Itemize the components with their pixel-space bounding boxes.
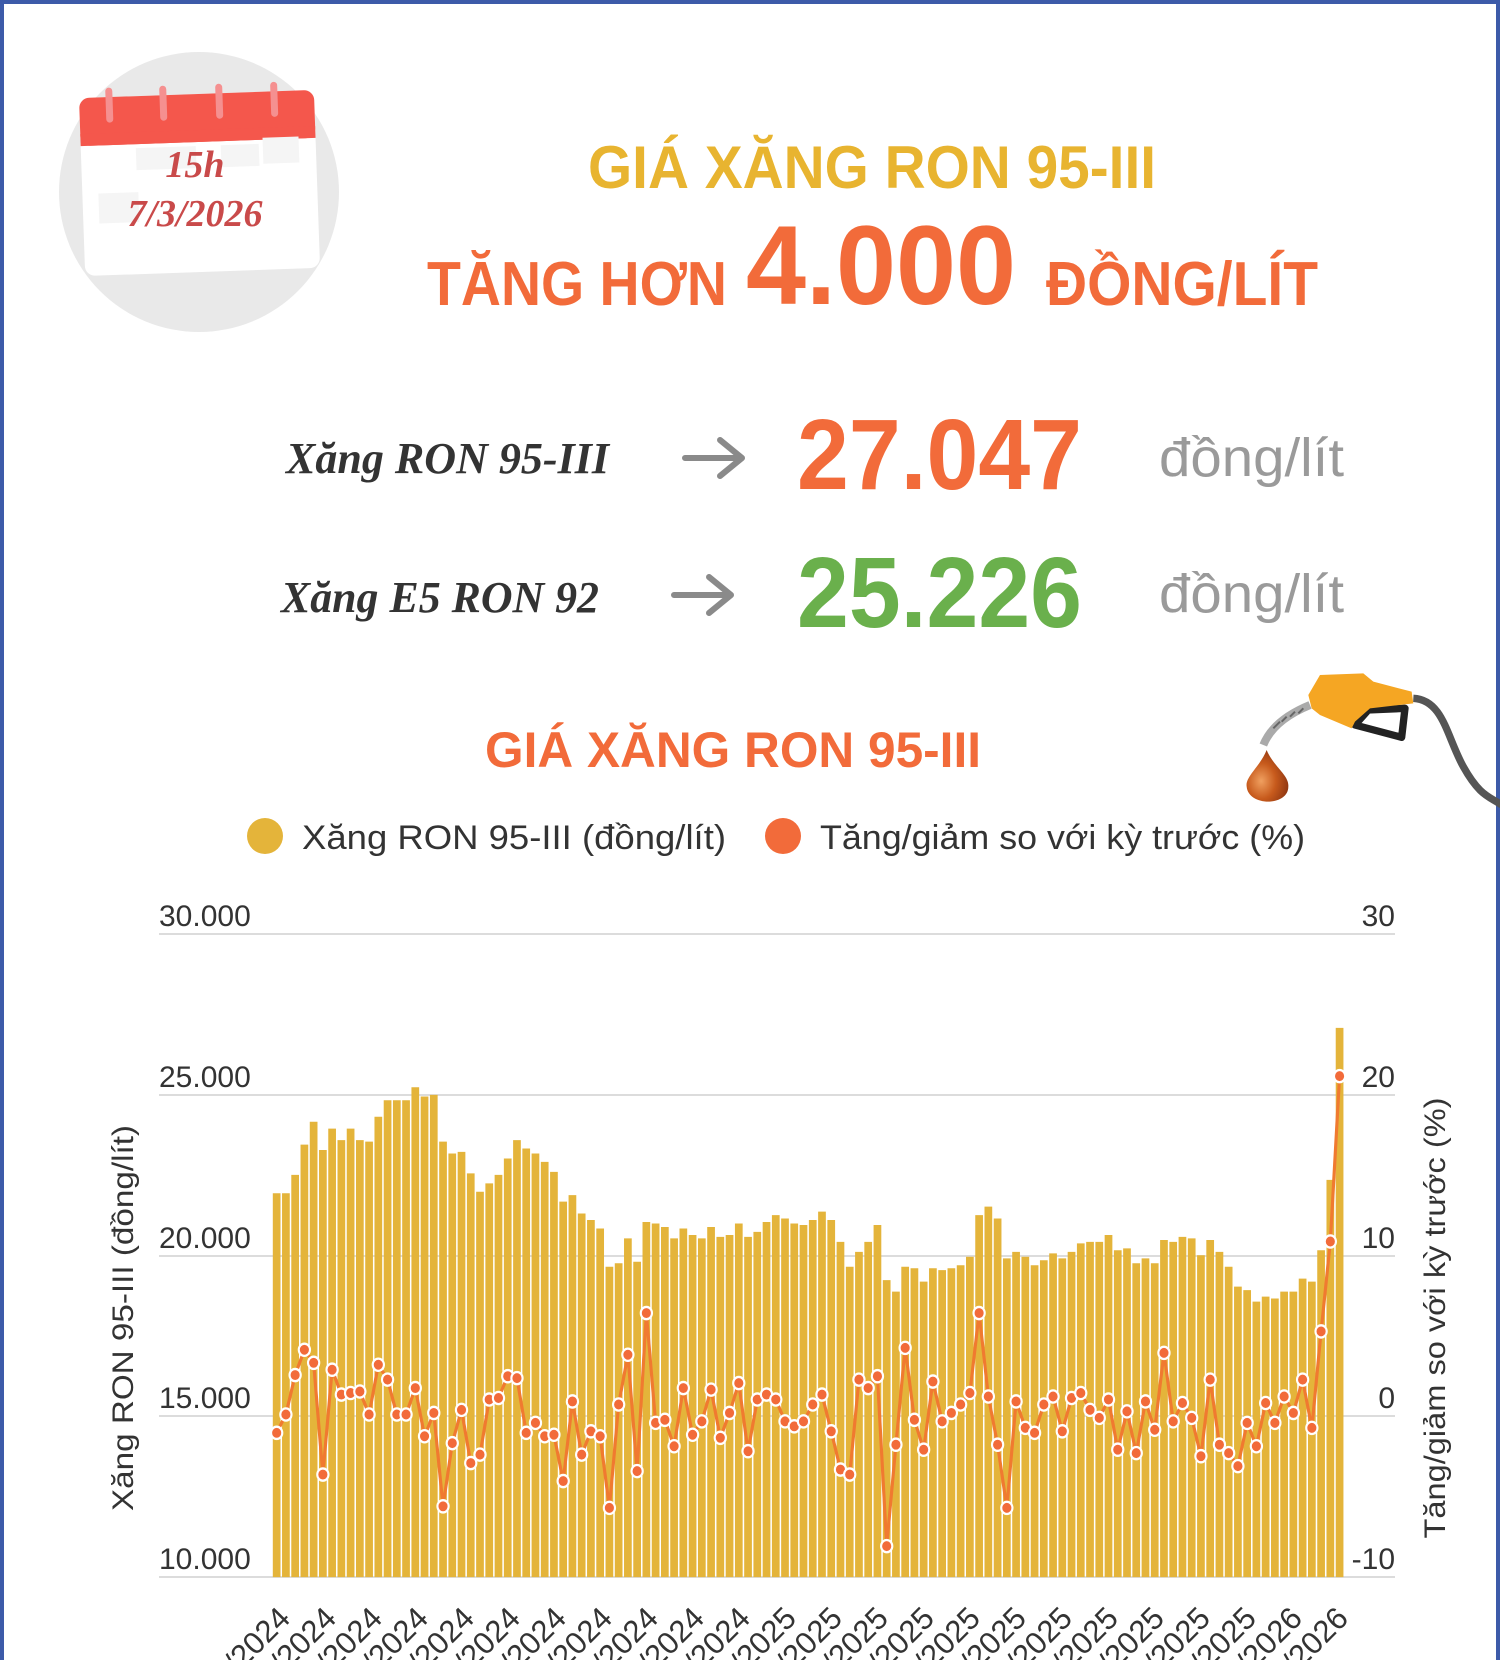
- line series: percent change: [277, 1076, 1340, 1546]
- chart: gridlines and axes: -10: [1352, 1543, 1395, 1576]
- x-axis date labels: [187, 1600, 1355, 1665]
- chart title: GIÁ XĂNG RON 95-III: [485, 722, 981, 778]
- price row: RON 95-III: Xăng RON 95-III: [284, 434, 611, 483]
- price row: RON 95-III: đồng/lít: [1159, 428, 1344, 488]
- arrow: [674, 577, 731, 613]
- icon: calendar date badge: 7/3/2026: [127, 193, 263, 235]
- right axis title: Tăng/giảm so với kỳ trước (%): [1419, 1098, 1452, 1538]
- legend: Xăng RON 95-III (đồng/lít): [302, 819, 726, 857]
- price row: E5 RON 92: [279, 537, 1344, 649]
- icon: calendar date badge: 15h: [165, 144, 225, 186]
- chart: gridlines and axes: 0: [1378, 1382, 1395, 1415]
- title line 2: [427, 203, 1318, 328]
- chart: gridlines and axes: 30.000: [159, 900, 251, 933]
- chart: gridlines and axes: 10: [1362, 1222, 1395, 1255]
- price row: E5 RON 92: đồng/lít: [1159, 564, 1344, 624]
- title line 2: 4.000: [746, 203, 1016, 328]
- arrow: [685, 440, 742, 476]
- price row: RON 95-III: [284, 399, 1344, 511]
- title line 2: ĐỒNG/LÍT: [1046, 250, 1318, 319]
- chart: gridlines and axes: 20.000: [159, 1222, 251, 1255]
- chart: gridlines and axes: 15.000: [159, 1382, 251, 1415]
- left axis title: Xăng RON 95-III (đồng/lít): [107, 1125, 140, 1511]
- chart: gridlines and axes: 20: [1362, 1061, 1395, 1094]
- chart: gridlines and axes: 30: [1362, 900, 1395, 933]
- chart: bars and percent line: [277, 1028, 1340, 1577]
- price row: E5 RON 92: 25.226: [797, 537, 1082, 649]
- legend: [247, 818, 1305, 857]
- chart: gridlines and axes: 25.000: [159, 1061, 251, 1094]
- chart: gridlines and axes: [159, 900, 1395, 1577]
- bar series: [277, 1028, 1340, 1577]
- price row: RON 95-III: 27.047: [797, 399, 1082, 511]
- icon: calendar date badge: [59, 52, 339, 332]
- chart: gridlines and axes: 10.000: [159, 1543, 251, 1576]
- icon: fuel nozzle with drop: [1247, 673, 1500, 805]
- title line 2: TĂNG HƠN: [427, 250, 727, 319]
- price row: E5 RON 92: Xăng E5 RON 92: [279, 573, 599, 622]
- title line 1: GIÁ XĂNG RON 95-III: [588, 134, 1156, 201]
- legend: Tăng/giảm so với kỳ trước (%): [820, 819, 1305, 857]
